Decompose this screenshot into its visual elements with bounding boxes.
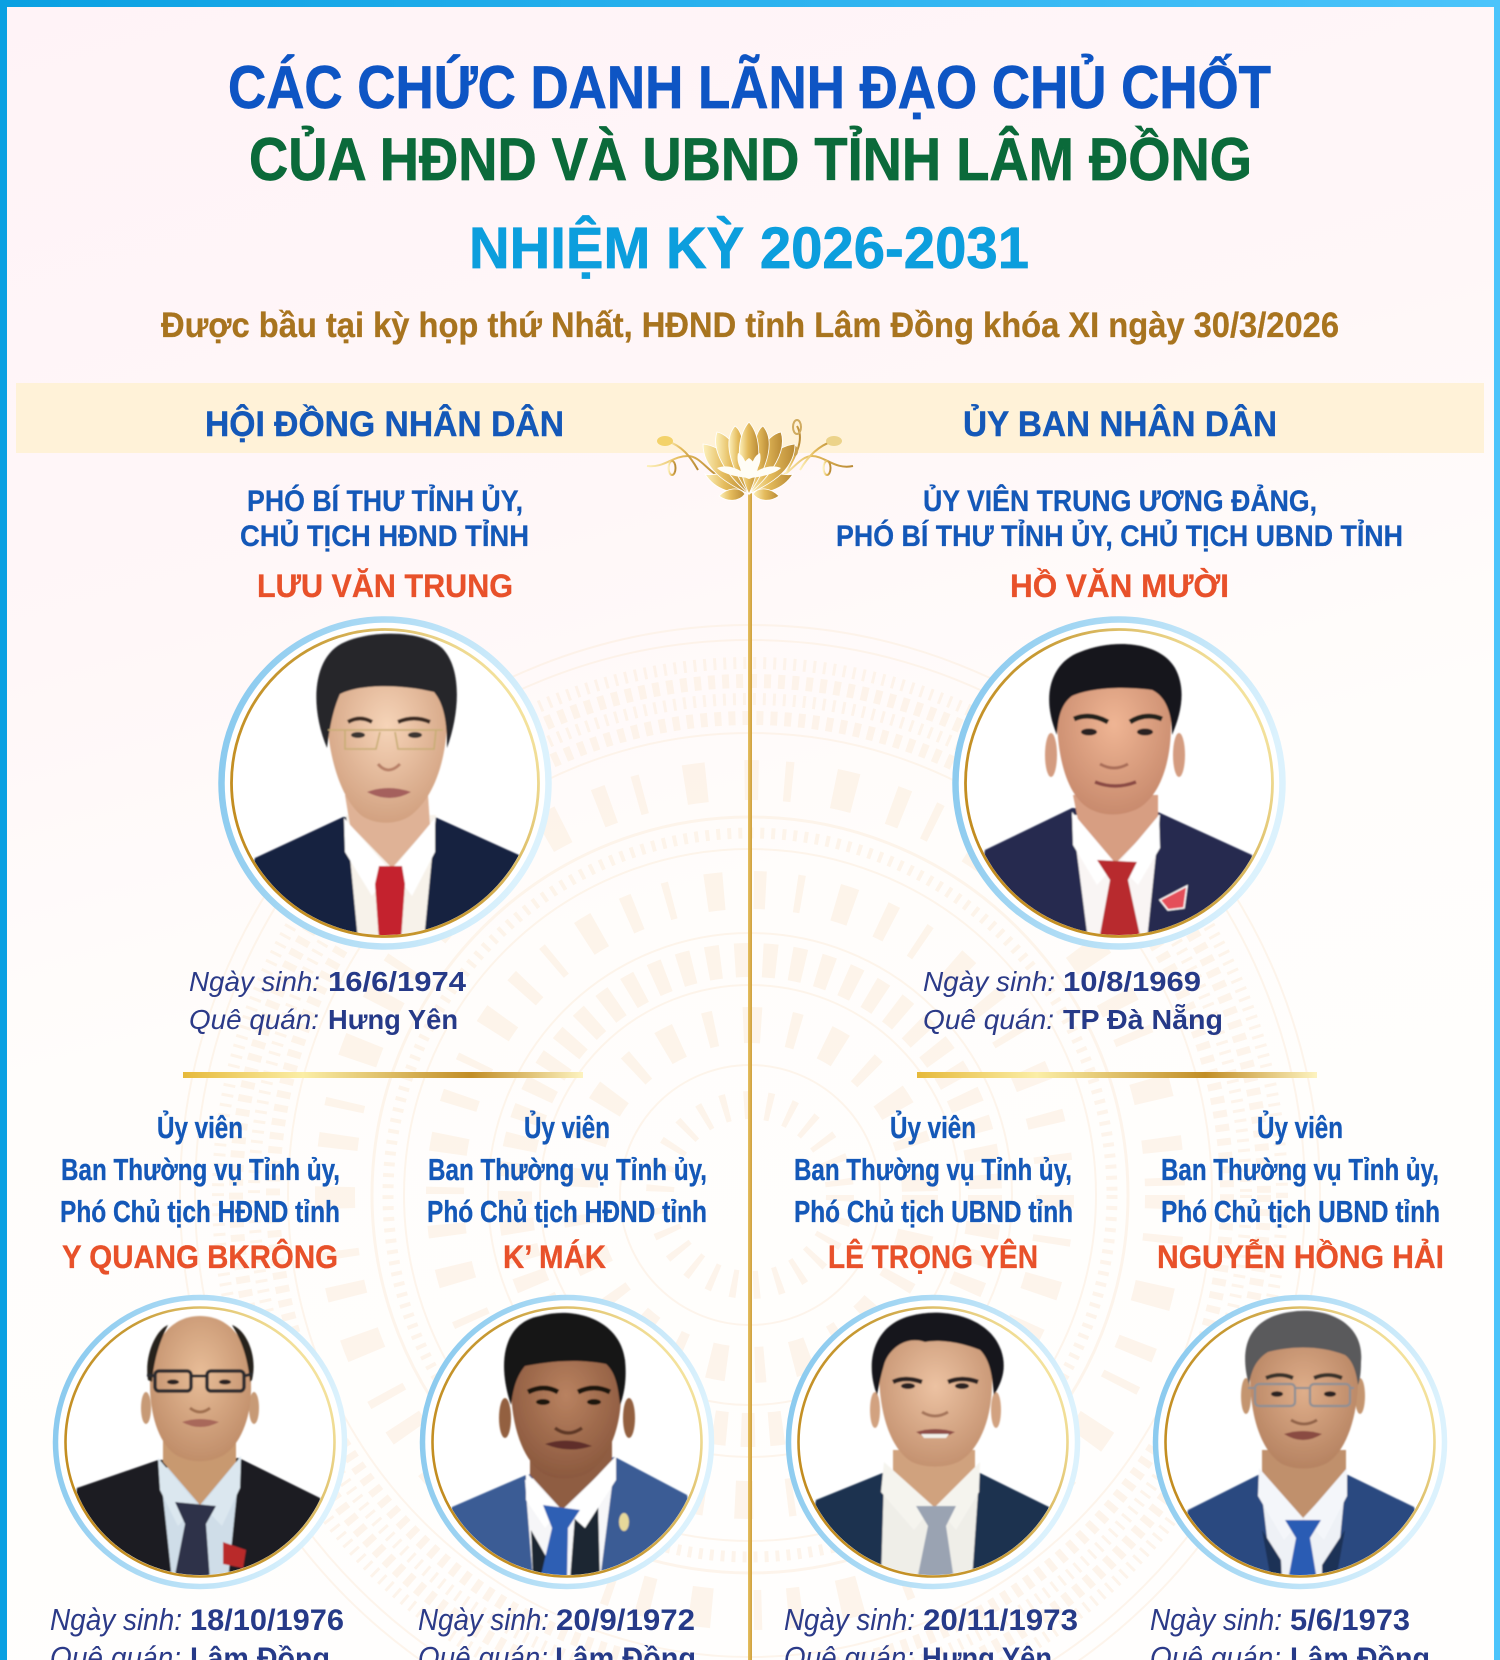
name: LÊ TRỌNG YÊN	[828, 1239, 1038, 1275]
name: Y QUANG BKRÔNG	[62, 1239, 338, 1275]
role title: PHÓ BÍ THƯ TỈNH ỦY,	[247, 484, 523, 518]
portrait: Hồ Văn Mười	[956, 620, 1282, 960]
birth info	[50, 1602, 344, 1660]
birth info: Ngày sinh:	[189, 966, 320, 997]
panel: Lê Trọng Yên	[784, 1109, 1078, 1660]
birth info: 10/8/1969	[1063, 966, 1201, 997]
birth info: Quê quán:	[189, 1004, 319, 1035]
portrait: Lê Trọng Yên	[788, 1298, 1078, 1600]
birth info	[189, 966, 466, 1035]
role title	[794, 1109, 1073, 1229]
role title	[427, 1109, 707, 1229]
panel: Y Quang Bkrông	[50, 1109, 344, 1660]
role title: Phó Chủ tịch UBND tỉnh	[794, 1194, 1073, 1229]
role title: Ban Thường vụ Tỉnh ủy,	[428, 1152, 707, 1187]
birth info: Quê quán:	[923, 1004, 1054, 1035]
role title: Phó Chủ tịch HĐND tỉnh	[60, 1194, 340, 1229]
section header band	[16, 383, 1484, 453]
birth info: Ngày sinh:	[1150, 1602, 1282, 1637]
birth info: 20/11/1973	[923, 1604, 1078, 1637]
birth info: Hưng Yên	[328, 1004, 458, 1035]
role title: Ủy viên	[524, 1109, 610, 1145]
divider	[183, 1072, 583, 1078]
birth info: 20/9/1972	[556, 1604, 695, 1637]
name: LƯU VĂN TRUNG	[257, 568, 513, 604]
role title: CHỦ TỊCH HĐND TỈNH	[240, 519, 529, 553]
portrait: K' Mák	[422, 1298, 712, 1600]
portrait: Nguyễn Hồng Hải	[1156, 1298, 1444, 1600]
background: faint bronze drum pattern	[180, 625, 1320, 1660]
heading: Hội đồng nhân dân: HỘI ĐỒNG NHÂN DÂN	[205, 404, 564, 444]
panel: HĐND chairman	[183, 484, 583, 1078]
panel: K' Mák	[418, 1109, 712, 1660]
birth info	[418, 1602, 696, 1660]
panel: UBND chairman	[836, 484, 1403, 1078]
name: NGUYỄN HỒNG HẢI	[1157, 1239, 1444, 1275]
name: HỒ VĂN MƯỜI	[1010, 568, 1229, 604]
title line 2: CỦA HĐND VÀ UBND TỈNH LÂM ĐỒNG	[249, 126, 1252, 193]
role title: Ủy viên	[1257, 1109, 1343, 1145]
birth info: TP Đà Nẵng	[1063, 1003, 1223, 1035]
role title: Ủy viên	[157, 1109, 243, 1145]
birth info	[1150, 1602, 1430, 1660]
title block	[161, 54, 1339, 345]
title line 1: CÁC CHỨC DANH LÃNH ĐẠO CHỦ CHỐT	[228, 54, 1271, 121]
role title: Ủy viên	[890, 1109, 976, 1145]
birth info: 16/6/1974	[328, 966, 466, 997]
divider	[917, 1072, 1317, 1078]
subtitle: Được bầu tại kỳ họp thứ Nhất, HĐND tỉnh Lâm Đồng khóa XI ngày 30/3/2026	[161, 306, 1339, 345]
role title: Ban Thường vụ Tỉnh ủy,	[61, 1152, 340, 1187]
birth info: Ngày sinh:	[418, 1602, 549, 1637]
role title	[240, 484, 529, 553]
center vertical divider	[748, 490, 752, 1660]
birth info: Ngày sinh:	[923, 966, 1055, 997]
icon: golden lotus	[647, 420, 853, 500]
birth info	[784, 1602, 1078, 1660]
title line 3: term: NHIỆM KỲ 2026-2031	[469, 216, 1029, 281]
role title	[1161, 1109, 1440, 1229]
role title	[836, 484, 1403, 553]
portrait: Lưu Văn Trung	[222, 620, 548, 960]
name: K’ MÁK	[503, 1239, 606, 1275]
role title: PHÓ BÍ THƯ TỈNH ỦY, CHỦ TỊCH UBND TỈNH	[836, 519, 1403, 553]
portrait: Y Quang Bkrông	[56, 1298, 344, 1600]
role title: ỦY VIÊN TRUNG ƯƠNG ĐẢNG,	[923, 484, 1317, 518]
birth info: Ngày sinh:	[50, 1602, 182, 1637]
birth info: Ngày sinh:	[784, 1602, 915, 1637]
birth info: 18/10/1976	[190, 1604, 344, 1637]
panel: Nguyễn Hồng Hải	[1150, 1109, 1444, 1660]
role title: Ban Thường vụ Tỉnh ủy,	[794, 1152, 1072, 1187]
heading: Ủy ban nhân dân: ỦY BAN NHÂN DÂN	[963, 404, 1277, 444]
birth info	[923, 966, 1223, 1035]
role title	[60, 1109, 340, 1229]
birth info: 5/6/1973	[1290, 1604, 1410, 1637]
role title: Phó Chủ tịch HĐND tỉnh	[427, 1194, 707, 1229]
